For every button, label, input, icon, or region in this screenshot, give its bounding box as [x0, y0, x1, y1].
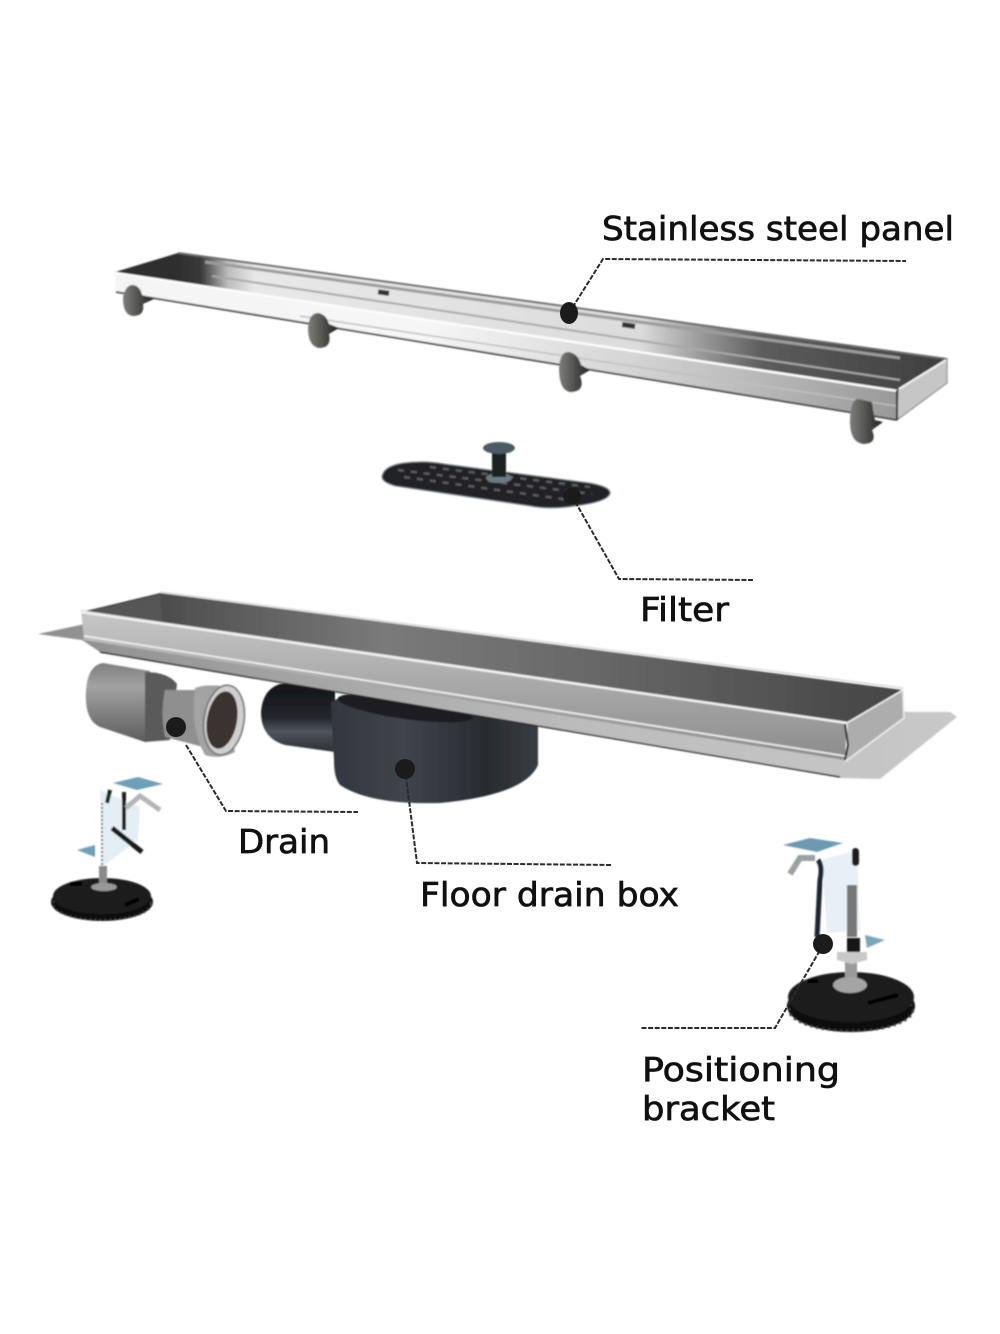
label: Drain [238, 822, 330, 861]
marker dot [560, 302, 578, 324]
channel left inner wall [92, 595, 162, 623]
large positioning bracket [783, 838, 915, 1032]
large bracket top plate [783, 838, 843, 852]
foot 1 [123, 285, 154, 316]
channel front face [81, 610, 847, 760]
channel rim highlight [160, 592, 903, 688]
tray slot right [622, 322, 635, 329]
small positioning bracket [51, 777, 163, 921]
small base teeth [53, 888, 151, 920]
foot 4 [850, 399, 883, 444]
tray front crease [300, 316, 897, 406]
large base teeth [789, 989, 913, 1031]
pipe rear section [86, 663, 150, 742]
large bracket slot [852, 848, 859, 866]
tray front highlight [116, 273, 898, 391]
tray bottom edge [116, 292, 897, 420]
foot 2 [308, 313, 339, 348]
tray corner seam [896, 390, 898, 420]
small base top [53, 878, 151, 914]
leader line [186, 745, 358, 812]
pipe collar [145, 672, 177, 742]
large bracket wing nut [790, 858, 815, 874]
leader line [640, 945, 823, 1028]
large bracket arm [817, 860, 821, 937]
plate handle base [486, 473, 512, 483]
small bracket wing nut [126, 796, 160, 810]
box lid [336, 688, 474, 728]
tray inner shadow band [205, 262, 900, 358]
tray front face [115, 272, 898, 420]
tray right end rim highlight [899, 360, 946, 389]
outlet cylinder [261, 683, 335, 752]
large base holes [808, 981, 898, 1003]
label: Filter [640, 590, 729, 629]
flange shadow line [100, 652, 840, 777]
label line 2: bracket [642, 1089, 775, 1128]
large base [787, 980, 915, 1032]
lower channel tray [38, 592, 957, 779]
small base holes [70, 884, 139, 905]
drain pipe [86, 663, 249, 757]
plate body [382, 462, 610, 508]
channel right end [846, 690, 904, 761]
large bracket body [822, 850, 860, 933]
callout: stainless steel panel [560, 209, 954, 324]
flange [38, 624, 957, 779]
leader line [572, 496, 754, 580]
channel front rim [81, 612, 847, 723]
pipe opening [202, 689, 242, 751]
marker dot [563, 488, 581, 504]
label: Floor drain box [420, 875, 679, 914]
leader line [569, 259, 906, 313]
small bracket nut [91, 883, 117, 891]
label line 1: Positioning [642, 1050, 840, 1089]
callout: floor drain box [395, 759, 679, 914]
plate perforations [398, 467, 592, 500]
marker dot [395, 759, 415, 779]
small bracket rod [99, 866, 107, 886]
callout: filter [563, 488, 754, 629]
tray inner ridge [212, 276, 900, 380]
leader line [405, 769, 612, 865]
small bracket slot [107, 790, 110, 803]
large bracket lower rod [845, 962, 857, 982]
large bracket dark nut [847, 938, 860, 952]
tray interior [115, 253, 947, 390]
pipe mouth ring [199, 683, 249, 757]
large bracket threaded rod [847, 885, 857, 937]
filter plate [382, 442, 610, 508]
channel lower highlight [84, 636, 845, 756]
stainless steel panel tray [115, 253, 947, 444]
large bracket side plate [865, 935, 885, 948]
small base [51, 883, 153, 921]
plate handle knob [483, 442, 515, 454]
small bracket lower plate [77, 845, 95, 857]
callout: positioning bracket [640, 934, 840, 1128]
marker dot [813, 934, 833, 954]
small bracket threaded post [101, 803, 103, 866]
tray back rim [178, 253, 947, 359]
pipe neck [162, 690, 215, 750]
foot 3 [559, 352, 590, 392]
callout: drain [166, 717, 358, 861]
plate handle stem [492, 452, 506, 477]
small bracket body [100, 790, 140, 867]
box body [331, 694, 538, 803]
pipe socket [194, 685, 235, 757]
small bracket top plate [113, 777, 163, 790]
large bracket nut [837, 952, 867, 964]
tray slot left [378, 289, 389, 296]
label: Stainless steel panel [602, 209, 954, 248]
tray right end [897, 359, 947, 420]
floor drain box [261, 683, 538, 803]
small bracket arm [122, 792, 126, 830]
large base top [788, 972, 914, 1022]
small bracket clamp [112, 828, 142, 852]
marker dot [166, 717, 186, 737]
channel corner seam [845, 724, 848, 760]
channel interior [81, 593, 903, 723]
large bracket lower nut [833, 977, 867, 993]
